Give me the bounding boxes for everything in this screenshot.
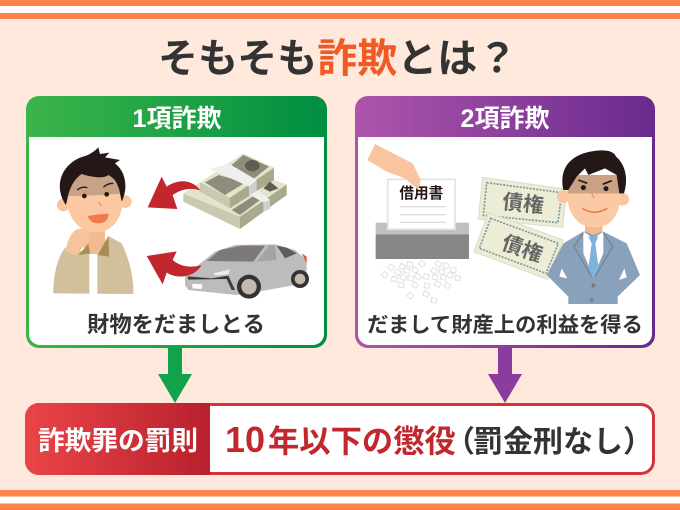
illustration: shredder	[367, 144, 469, 303]
penalty text: ）	[623, 426, 653, 459]
penalty bar	[25, 403, 655, 475]
caption: 財物をだましとる: 財物をだましとる	[87, 312, 265, 337]
arrow: purple	[488, 348, 522, 403]
caption: だまして財産上の利益を得る: だまして財産上の利益を得る	[367, 313, 643, 337]
illustration: bonds and man in suit	[474, 150, 640, 304]
illustration: car	[185, 244, 309, 299]
heading: 2項詐欺: 2項詐欺	[461, 105, 549, 133]
penalty text: 罰金刑なし	[473, 426, 623, 459]
heading: 1項詐欺: 1項詐欺	[133, 105, 221, 133]
bonds	[478, 177, 567, 227]
panel: 1項詐欺	[26, 96, 327, 348]
illustration: man with fist on chin	[53, 147, 133, 294]
illustration: bonds and man in suit: 債権	[501, 191, 545, 218]
man	[547, 232, 640, 304]
title: そもそも詐欺とは？	[158, 37, 517, 81]
arrows: toward man	[147, 177, 202, 284]
penalty text: 10	[225, 419, 265, 460]
panel: 2項詐欺	[355, 96, 655, 348]
illustration: money stack	[183, 153, 287, 229]
paper shreds	[381, 260, 461, 303]
penalty text: （	[445, 426, 475, 459]
illustration: shredder: 借用書	[399, 184, 443, 202]
penalty text: 年以下の懲役	[268, 424, 456, 459]
label: 詐欺罪の罰則: 詐欺罪の罰則	[38, 426, 198, 456]
arrow: green	[158, 348, 192, 403]
illustration: bonds and man in suit: 債権	[499, 232, 546, 267]
